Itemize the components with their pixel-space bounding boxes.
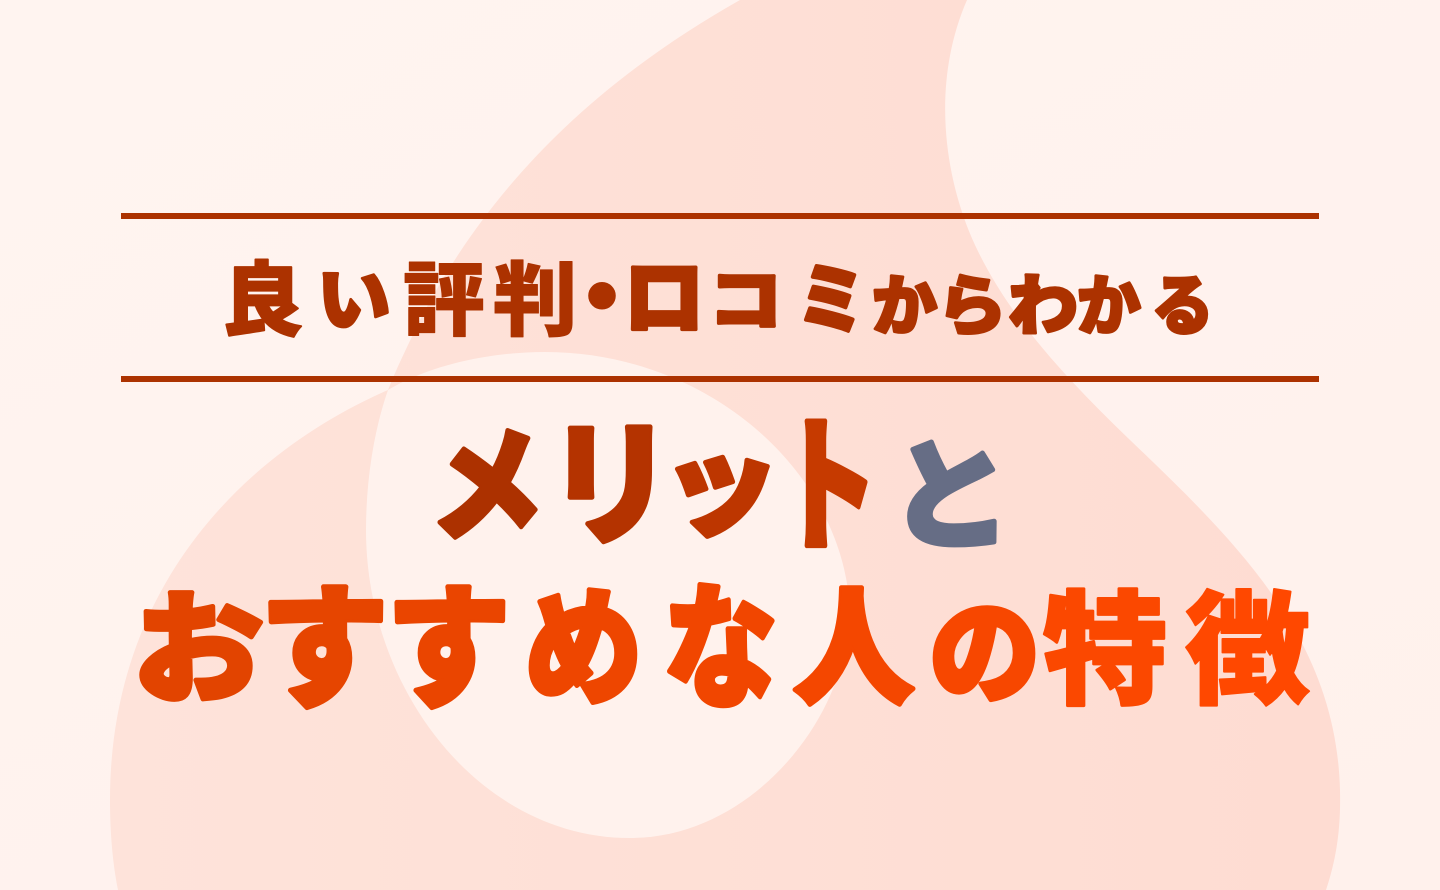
heading line 2: リ bbox=[548, 411, 673, 562]
top rule bbox=[121, 213, 1319, 219]
heading line 1: ミ bbox=[797, 259, 865, 343]
heading line 1: 評 bbox=[403, 256, 485, 347]
heading line 3: す bbox=[386, 576, 511, 725]
heading line 1: ら bbox=[937, 271, 1007, 344]
bottom rule bbox=[121, 376, 1319, 382]
heading line 3: な bbox=[664, 575, 777, 725]
heading line 3 bbox=[133, 575, 1310, 725]
heading line 1: 良 bbox=[221, 256, 303, 347]
heading line 2: ッ bbox=[661, 423, 781, 549]
heading line 1: い bbox=[317, 261, 391, 341]
heading line 1: わ bbox=[1008, 271, 1078, 344]
heading line 1: ロ bbox=[624, 253, 704, 345]
heading line 1: か bbox=[872, 270, 937, 343]
heading line 1: 判 bbox=[493, 256, 577, 347]
heading line 3: す bbox=[260, 575, 389, 725]
heading line 3: お bbox=[133, 582, 264, 718]
heading line 3: め bbox=[524, 578, 642, 722]
heading line 1: る bbox=[1151, 269, 1214, 343]
flame inner cutout bbox=[366, 352, 849, 838]
heading line 1: か bbox=[1077, 270, 1141, 343]
heading line 3: 特 bbox=[1043, 583, 1167, 721]
heading line 3: 人 bbox=[793, 580, 914, 721]
heading line 1: ・ bbox=[560, 252, 644, 346]
heading line 3: 徴 bbox=[1185, 584, 1310, 721]
heading line 1 bbox=[221, 252, 1214, 347]
heading line 2 bbox=[429, 407, 1012, 569]
heading line 2: メ bbox=[429, 419, 544, 557]
heading line 1: コ bbox=[709, 263, 782, 338]
heading line 2: ト bbox=[778, 407, 878, 569]
heading line 2: と bbox=[889, 431, 1012, 564]
heading line 3: の bbox=[929, 590, 1040, 718]
